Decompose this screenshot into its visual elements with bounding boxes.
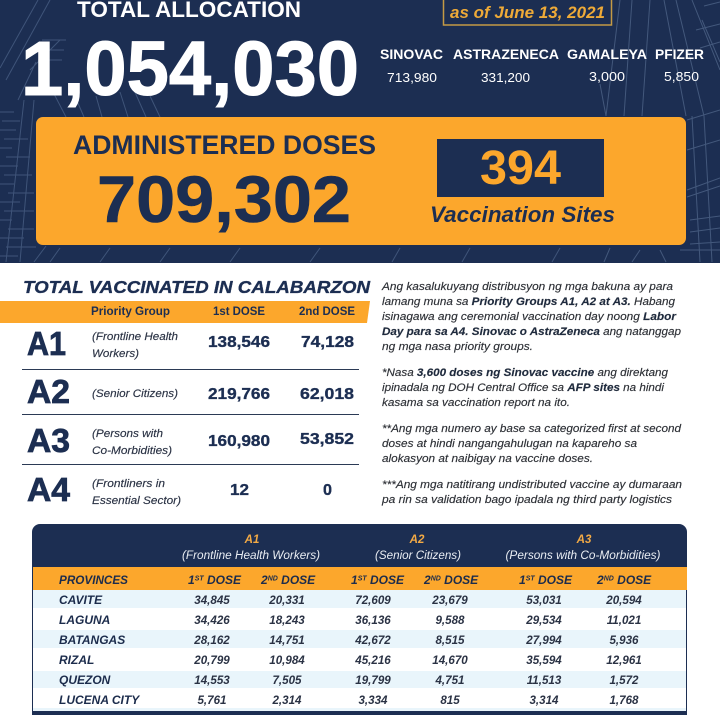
vaccination sites count box: 394 bbox=[480, 142, 561, 195]
table column header bar: 2 bbox=[424, 573, 431, 587]
vaccination sites count box bbox=[437, 139, 604, 197]
table header bar bbox=[0, 301, 370, 323]
row: Quezon: QUEZON bbox=[59, 673, 111, 687]
note: distribution: lamang muna sa Priority Groups A1, A2 at A3. Habang bbox=[382, 296, 676, 308]
table column header bar: DOSE bbox=[441, 573, 479, 587]
brand: Gamaleya: 3,000 bbox=[589, 69, 625, 84]
row: A4 bbox=[27, 471, 332, 508]
brand: Pfizer: 5,850 bbox=[664, 69, 699, 84]
row: A4: 0 bbox=[323, 482, 332, 499]
row: A3: 53,852 bbox=[300, 431, 354, 448]
row: Laguna: 11,021 bbox=[607, 614, 641, 627]
note: Sinovac doses: *Nasa 3,600 doses ng Sinovac vaccine ang direktang bbox=[382, 367, 669, 379]
priority group table bbox=[0, 301, 370, 508]
row: A2: 62,018 bbox=[300, 386, 354, 403]
brand: Pfizer: PFIZER bbox=[655, 47, 704, 62]
row: Quezon bbox=[59, 673, 639, 687]
brand: Gamaleya: GAMALEYA bbox=[567, 47, 647, 62]
table column header bar: ND bbox=[268, 576, 278, 582]
row: Cavite: 20,594 bbox=[605, 594, 642, 607]
row: Laguna: 36,136 bbox=[355, 614, 391, 627]
row: Batangas: 8,515 bbox=[435, 634, 465, 647]
row: A1: 138,546 bbox=[208, 334, 270, 351]
vaccination sites label: Vaccination Sites bbox=[430, 202, 615, 227]
table column header bar: DOSE bbox=[204, 573, 242, 587]
note: distribution: ng mga nasa priority groups. bbox=[382, 341, 533, 353]
row: A2 bbox=[27, 373, 354, 410]
row: Laguna: 29,534 bbox=[525, 614, 562, 627]
row: Cavite: 53,031 bbox=[526, 594, 562, 607]
table column header bar: PROVINCES bbox=[59, 573, 128, 587]
row: Lucena City bbox=[59, 693, 639, 707]
row: Rizal: 12,961 bbox=[606, 654, 642, 667]
row: A2: (Senior Citizens) bbox=[92, 388, 178, 400]
table column header bar: ST bbox=[358, 576, 367, 582]
total allocation number: 1,054,030 bbox=[21, 26, 359, 112]
row: Rizal: 20,799 bbox=[193, 654, 230, 667]
row: Rizal: 35,594 bbox=[526, 654, 562, 667]
table column header bar bbox=[33, 567, 687, 590]
row: Batangas: 42,672 bbox=[354, 634, 391, 647]
row: Lucena City: 5,761 bbox=[197, 694, 227, 707]
note: distribution: Ang kasalukuyang distribusyon ng mga bakuna ay para bbox=[381, 281, 673, 293]
row: Laguna bbox=[59, 613, 641, 627]
row: A3: (Persons with bbox=[92, 428, 163, 440]
row: Cavite: 34,845 bbox=[194, 594, 230, 607]
row: Cavite bbox=[59, 593, 642, 607]
note: distribution bbox=[381, 281, 681, 353]
row: Quezon: 11,513 bbox=[527, 674, 562, 687]
table column header bar: ND bbox=[604, 576, 614, 582]
row: Laguna: LAGUNA bbox=[59, 613, 110, 627]
note: distribution: isinagawa ang ceremonial vaccination day noong Labor bbox=[382, 311, 677, 323]
note: categorized doses: **Ang mga numero ay base sa categorized first at second bbox=[382, 423, 682, 435]
row: Quezon: 4,751 bbox=[434, 674, 465, 687]
brand: AstraZeneca bbox=[453, 47, 559, 85]
table row stripes bbox=[33, 590, 686, 711]
table group headers: A2 bbox=[409, 534, 425, 546]
table column header bar: 2 bbox=[261, 573, 268, 587]
row: A4: 12 bbox=[230, 482, 249, 499]
row: Cavite: 20,331 bbox=[268, 594, 305, 607]
table column header bar: ST bbox=[195, 576, 204, 582]
table header bar: 2nd DOSE bbox=[299, 306, 355, 318]
row: Rizal: 14,670 bbox=[432, 654, 468, 667]
brand: AstraZeneca: 331,200 bbox=[481, 70, 530, 85]
row: Laguna: 34,426 bbox=[194, 614, 230, 627]
vaccine brand breakdown bbox=[380, 47, 704, 85]
row: Lucena City: 3,314 bbox=[529, 694, 559, 707]
note: Sinovac doses: ipinadala ng DOH Central Office sa AFP sites na hindi bbox=[382, 382, 664, 394]
table group headers: (Frontline Health Workers) bbox=[182, 550, 320, 562]
note: categorized doses: alokasyon at naibigay na vaccine doses. bbox=[382, 453, 593, 465]
brand: Sinovac bbox=[380, 47, 443, 85]
brand: Gamaleya bbox=[567, 47, 647, 84]
row: A3: Co-Morbidities) bbox=[92, 445, 172, 457]
row: A2: 219,766 bbox=[208, 386, 270, 403]
row: Lucena City: 1,768 bbox=[609, 694, 639, 707]
row: Batangas bbox=[59, 633, 639, 647]
row: Batangas: BATANGAS bbox=[59, 633, 125, 647]
table column header bar: 1 bbox=[351, 573, 358, 587]
header background: navy with building line art bbox=[0, 0, 720, 263]
brand: Sinovac: 713,980 bbox=[387, 70, 437, 85]
row: Quezon: 19,799 bbox=[355, 674, 391, 687]
row: Rizal: RIZAL bbox=[59, 653, 94, 667]
table column header bar: DOSE bbox=[535, 573, 573, 587]
row: Rizal bbox=[59, 653, 642, 667]
table group headers bbox=[182, 534, 661, 562]
table column header bar: ND bbox=[431, 576, 441, 582]
panel: province table bbox=[32, 524, 687, 715]
table column header bar: 1 bbox=[519, 573, 526, 587]
table group headers: A1 bbox=[244, 534, 259, 546]
administered doses number: 709,302 bbox=[97, 162, 351, 236]
row: Lucena City: 2,314 bbox=[271, 694, 302, 707]
row: A3 bbox=[27, 422, 354, 459]
table column header bar: DOSE bbox=[614, 573, 652, 587]
note: undistributed vaccine: ***Ang mga natitirang undistributed vaccine ay dumaraan bbox=[382, 479, 682, 491]
notes text block bbox=[381, 281, 682, 506]
row: A1: Workers) bbox=[92, 348, 139, 360]
row: Cavite: CAVITE bbox=[59, 593, 103, 607]
heading: total vaccinated in Calabarzon: TOTAL VACCINATED IN CALABARZON bbox=[23, 277, 370, 297]
row: Lucena City: 815 bbox=[440, 694, 460, 707]
row: Cavite: 23,679 bbox=[431, 594, 468, 607]
row: A2: A2 bbox=[27, 373, 70, 410]
note: Sinovac doses bbox=[382, 367, 669, 409]
row: A1 bbox=[27, 325, 354, 362]
row: Quezon: 7,505 bbox=[272, 674, 302, 687]
table column header bar: DOSE bbox=[278, 573, 316, 587]
row: A4: A4 bbox=[27, 471, 71, 508]
row: A3: A3 bbox=[27, 422, 70, 459]
row: Batangas: 27,994 bbox=[525, 634, 562, 647]
row: Laguna: 18,243 bbox=[269, 614, 305, 627]
row: A1: (Frontline Health bbox=[92, 331, 178, 343]
note: distribution: Day para sa A4. Sinovac o AstraZeneca ang natanggap bbox=[382, 326, 681, 338]
brand: AstraZeneca: ASTRAZENECA bbox=[453, 47, 559, 62]
row: A1: 74,128 bbox=[301, 334, 354, 351]
row: Quezon: 1,572 bbox=[609, 674, 639, 687]
note: Sinovac doses: kasama sa vaccination report na ito. bbox=[382, 397, 570, 409]
row: Quezon: 14,553 bbox=[194, 674, 230, 687]
table column header bar: 1 bbox=[188, 573, 195, 587]
panel: administered doses bbox=[36, 117, 686, 245]
heading: administered doses: ADMINISTERED DOSES bbox=[73, 130, 376, 160]
row: Cavite: 72,609 bbox=[355, 594, 391, 607]
row: Laguna: 9,588 bbox=[435, 614, 465, 627]
table group headers: A3 bbox=[576, 534, 592, 546]
table group headers: (Persons with Co-Morbidities) bbox=[506, 550, 661, 562]
row: A4: (Frontliners in bbox=[92, 478, 165, 490]
table column header bar: ST bbox=[526, 576, 535, 582]
note: undistributed vaccine: pa rin sa validation bago ipadala ng third party logistics bbox=[381, 494, 672, 506]
table header bar: 1st DOSE bbox=[213, 306, 265, 318]
table header bar: Priority Group bbox=[91, 306, 170, 318]
row: Rizal: 45,216 bbox=[354, 654, 391, 667]
note: undistributed vaccine bbox=[381, 479, 682, 506]
row: Lucena City: 3,334 bbox=[358, 694, 388, 707]
row: Lucena City: LUCENA CITY bbox=[59, 693, 140, 707]
row: A1: A1 bbox=[27, 325, 66, 362]
brand: Sinovac: SINOVAC bbox=[380, 47, 443, 62]
note: categorized doses bbox=[382, 423, 682, 465]
date badge: as of June 13, 2021 bbox=[450, 3, 605, 22]
note: categorized doses: doses at hindi nangangahulugan na kapareho sa bbox=[382, 438, 637, 450]
row: A4: Essential Sector) bbox=[92, 495, 181, 507]
row: Batangas: 28,162 bbox=[193, 634, 230, 647]
table column header bar: DOSE bbox=[367, 573, 405, 587]
row: A3: 160,980 bbox=[208, 433, 270, 450]
table group headers: (Senior Citizens) bbox=[375, 550, 461, 562]
brand: Pfizer bbox=[655, 47, 704, 84]
row: Batangas: 14,751 bbox=[269, 634, 305, 647]
row: Batangas: 5,936 bbox=[609, 634, 639, 647]
row: Rizal: 10,984 bbox=[269, 654, 305, 667]
table column header bar: 2 bbox=[597, 573, 604, 587]
